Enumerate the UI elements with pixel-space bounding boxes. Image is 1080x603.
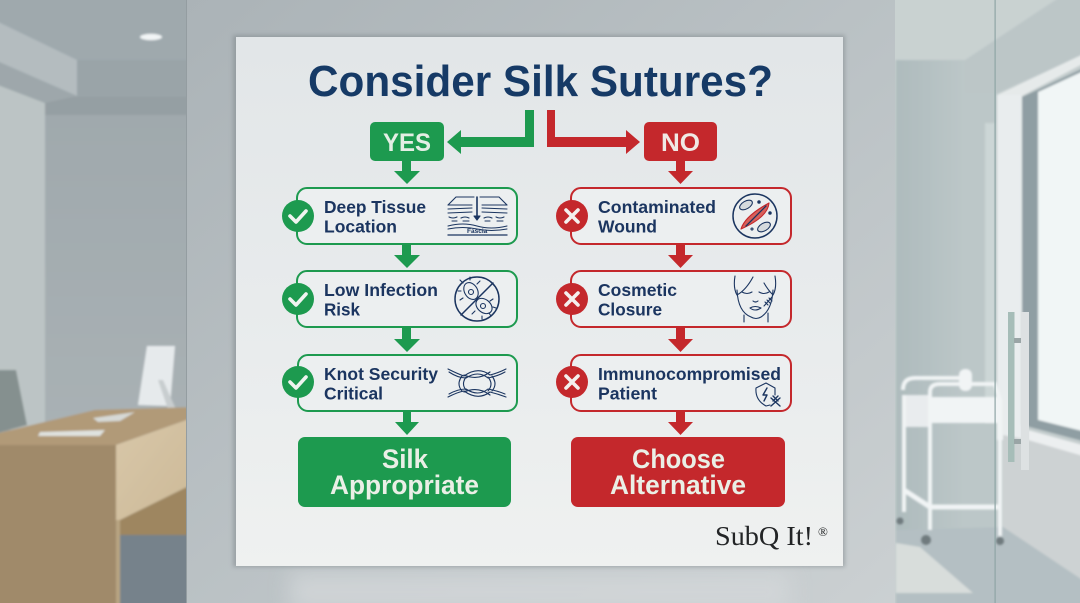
result: choose alternative (571, 437, 785, 507)
card: knot security critical (282, 355, 517, 411)
result: silk appropriate: Silk (382, 444, 429, 474)
icon: cross (556, 366, 588, 398)
yes branch arrow (447, 110, 534, 154)
icon: tissue layers fascia (448, 197, 507, 235)
card: cosmetic closure (556, 271, 791, 327)
background: office room left (0, 0, 195, 603)
arrow: immunocompromised to result (668, 411, 693, 435)
logo: SubQ It! (715, 521, 813, 551)
arrow: cosmetic closure to immunocompromised (668, 328, 693, 352)
card: immunocompromised patient (556, 355, 791, 411)
icon: tissue layers fascia: Fascia (467, 228, 488, 235)
arrow: no to contaminated wound (668, 161, 693, 184)
no label (644, 122, 717, 161)
text: cosmetic closure: Cosmetic (598, 280, 677, 300)
card: deep tissue location (282, 188, 517, 244)
text: contaminated wound: Contaminated (598, 197, 716, 217)
icon: no microbes (455, 277, 499, 321)
text: deep tissue location: Location (324, 216, 397, 236)
text: contaminated wound: Wound (598, 216, 657, 236)
text: knot security critical: Knot Security (324, 364, 438, 384)
result: choose alternative: Alternative (610, 470, 746, 500)
arrow: low infection to knot security (394, 328, 420, 352)
logo: ® (818, 524, 828, 539)
text: deep tissue location: Deep Tissue (324, 197, 426, 217)
arrow: contaminated wound to cosmetic closure (668, 244, 693, 268)
icon: shield (756, 383, 780, 406)
result: choose alternative: Choose (632, 444, 725, 474)
text: immunocompromised patient: Patient (598, 384, 657, 404)
arrow: yes to deep tissue (394, 161, 420, 184)
icon: check (282, 200, 314, 232)
no branch arrow (547, 110, 640, 154)
icon: cross (556, 200, 588, 232)
background: medical cart (896, 369, 1004, 545)
icon: cross (556, 283, 588, 315)
background: clinic room right (885, 0, 1080, 603)
yes label: YES (383, 129, 431, 157)
text: low infection risk: Low Infection (324, 280, 438, 300)
text: cosmetic closure: Closure (598, 300, 662, 320)
yes label (370, 122, 444, 161)
no label: NO (661, 129, 700, 157)
icon: infected wound (733, 194, 777, 238)
background: glass door and handle (994, 0, 1029, 603)
text: knot security critical: Critical (324, 384, 383, 404)
arrow: deep tissue to low infection (394, 244, 420, 268)
result: silk appropriate: Appropriate (330, 470, 479, 500)
poster shadow (233, 35, 845, 567)
icon: check (282, 366, 314, 398)
icon: face with sutures (734, 276, 776, 322)
title: Consider Silk Sutures? (308, 57, 773, 106)
arrow: knot security to result (395, 411, 419, 435)
background: wall (186, 0, 895, 603)
text: low infection risk: Risk (324, 300, 360, 320)
card: contaminated wound (556, 188, 791, 244)
card: low infection risk (282, 271, 517, 327)
result: silk appropriate (298, 437, 511, 507)
icon: check (282, 283, 314, 315)
icon: knot (448, 369, 506, 397)
poster panel (236, 37, 843, 566)
text: immunocompromised patient: Immunocompromised (598, 364, 781, 384)
